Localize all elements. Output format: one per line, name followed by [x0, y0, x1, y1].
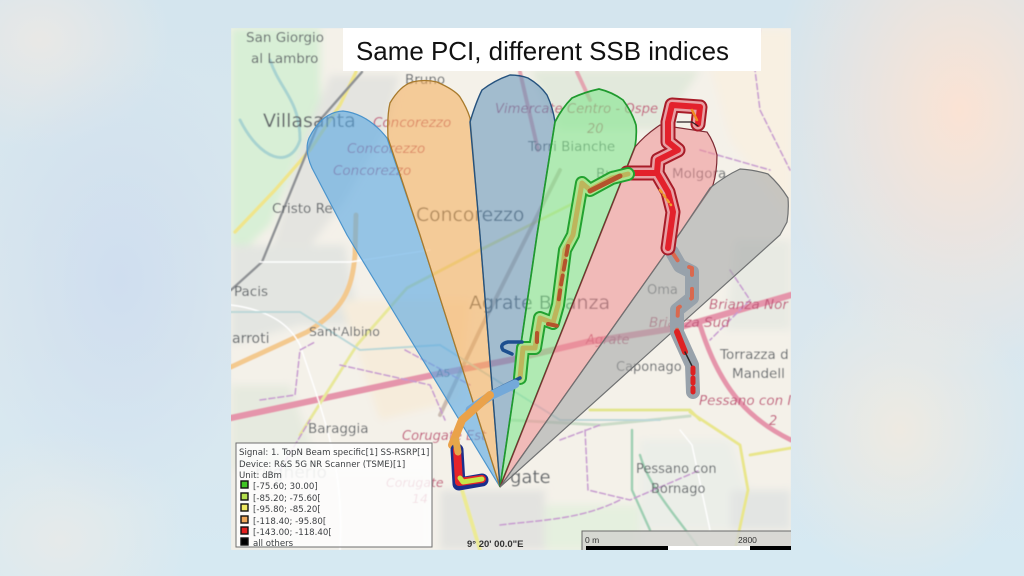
legend: Signal: 1. TopN Beam specific[1] SS-RSRP[1] — [239, 448, 429, 458]
map place labels: Corugate — [386, 475, 444, 490]
map place labels: arroti — [232, 331, 269, 347]
map place labels: San Giorgio — [246, 30, 324, 46]
map place labels: Pessano con — [636, 462, 717, 477]
scale bar: 2800 — [738, 535, 757, 545]
map place labels: Concorezzo — [373, 115, 451, 131]
legend entry: all others — [240, 537, 293, 546]
map place labels: Pessano con I — [699, 393, 791, 409]
title: Same PCI, different SSB indices — [356, 36, 729, 66]
map place labels: Villasanta — [263, 110, 356, 132]
map place labels — [232, 30, 791, 506]
route segment: orange beam — [452, 395, 490, 445]
map place labels: Sant'Albino — [309, 324, 380, 339]
route segment: L-shaped start — [457, 450, 482, 484]
map place labels: Mandell — [732, 366, 785, 382]
roads — [231, 30, 791, 550]
map place labels: Bruno — [405, 72, 445, 88]
map place labels: Agrate Brianza — [469, 292, 610, 314]
map place labels: Cristo Re — [272, 201, 333, 217]
map place labels: Vimercate Centro - Ospe — [495, 102, 658, 117]
map place labels: gate — [510, 467, 551, 488]
beam: green — [500, 89, 636, 487]
map place labels: Torrazza d — [719, 347, 789, 363]
base map — [231, 28, 791, 550]
legend entry: -118.40 to -95.80: [-118.40; -95.80[ — [253, 517, 326, 527]
coordinate label: 9° 20' 00.0"E — [467, 539, 524, 550]
map place labels: Agrate — [585, 333, 630, 348]
map place labels: Brianza Sud — [649, 315, 730, 331]
route segment: green beam — [520, 174, 628, 378]
legend — [236, 443, 432, 549]
legend entry: -85.20 to -75.60: [-85.20; -75.60[ — [253, 494, 321, 504]
route segment: gray beam — [672, 252, 693, 392]
legend: Device: R&S 5G NR Scanner (TSME)[1] — [239, 460, 405, 470]
legend entry: -75.60 to 30.00: [-75.60; 30.00] — [253, 482, 318, 492]
map place labels: Baraggia — [308, 421, 369, 437]
map place labels: rugherio — [255, 463, 327, 483]
drive route: measurements — [452, 105, 700, 484]
figure: coverage map with beams — [231, 28, 791, 550]
route segment: dark blue beam — [490, 342, 522, 393]
map place labels: 20 — [587, 122, 604, 137]
map place labels: Concorezzo — [416, 205, 524, 226]
map place labels: Molgora — [672, 166, 726, 182]
map place labels: Bornago — [651, 482, 705, 497]
map place labels: al Lambro — [251, 51, 318, 67]
map place labels: Corugate Est — [402, 429, 487, 444]
map place labels: Brianza Nor — [709, 297, 789, 313]
scale bar — [582, 530, 791, 550]
scale bar: 0 m — [585, 535, 599, 545]
map place labels: Pacis — [234, 284, 268, 300]
map place labels: 2 — [769, 414, 777, 429]
map place labels: Concorezzo — [333, 163, 411, 179]
beam: orange — [388, 80, 500, 487]
map place labels: Oma — [647, 283, 678, 298]
map place labels: Torri Bianche — [527, 139, 615, 155]
route segment: red beam — [627, 105, 700, 248]
legend entry: -143.00 to -118.40: [-143.00; -118.40[ — [253, 528, 332, 538]
map place labels: Caponago — [616, 360, 682, 375]
beam: gray — [500, 169, 788, 487]
beam: dark blue — [470, 75, 555, 487]
map place labels: Bu — [596, 166, 614, 182]
map place labels: Concorezzo — [347, 141, 425, 157]
legend entry: all others: all others — [253, 539, 294, 549]
legend: Unit: dBm — [239, 471, 282, 481]
legend entry: -95.80 to -85.20: [-95.80; -85.20[ — [253, 505, 321, 515]
map place labels: A5 — [436, 367, 451, 380]
map place labels: 14 — [412, 491, 428, 506]
beam: red — [500, 125, 717, 487]
title — [343, 28, 761, 71]
beam: blue — [307, 111, 500, 487]
